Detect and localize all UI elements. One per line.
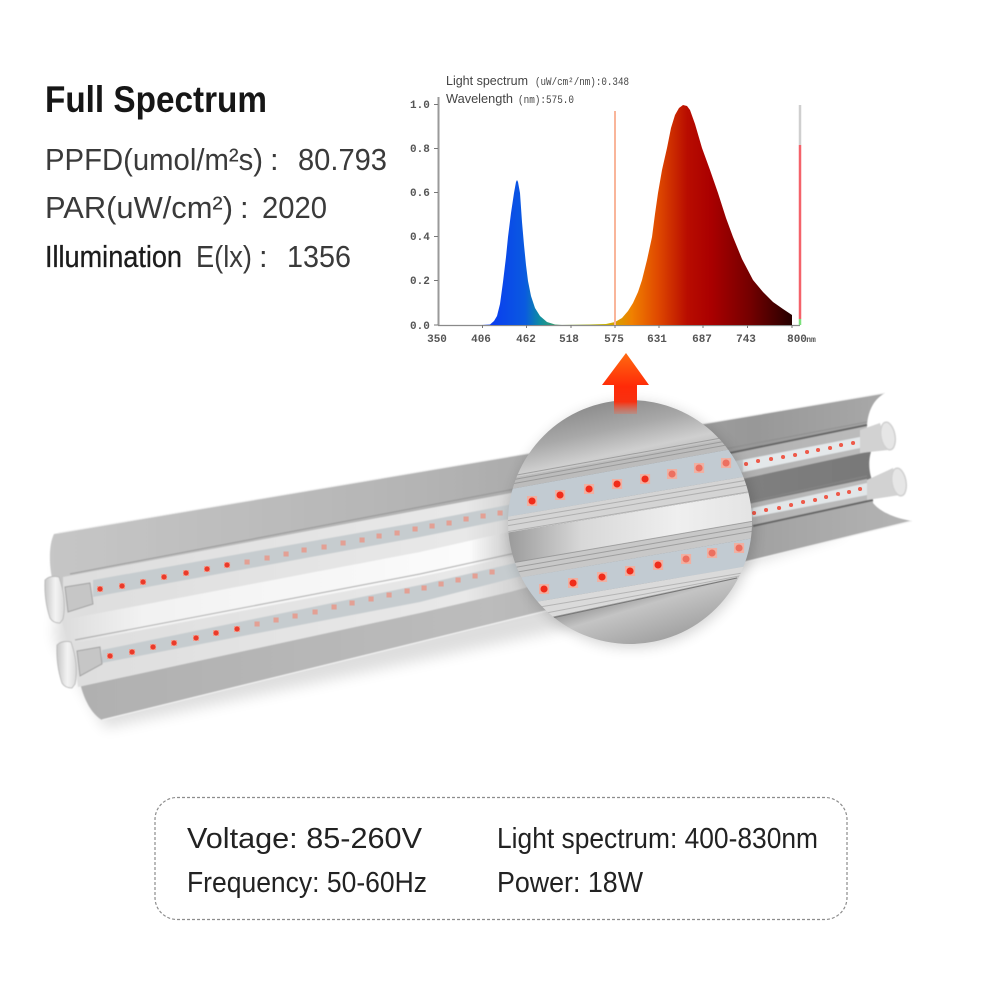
tube 1 dark shade [725,425,867,454]
lens lower reflector [553,576,739,644]
PPFD reading: : [270,142,279,177]
panel: specifications [155,798,847,920]
tube 2 ridges [75,476,867,640]
lens tube 2 housing [516,522,752,577]
lens led housings [532,463,739,589]
tube 2 dark shade [753,500,873,526]
red peak [560,105,792,325]
x axis labels: 350 [427,334,447,346]
x axis labels: 518 [559,334,579,346]
chart readout: (uW/cm²/nm):0.348 [535,77,629,89]
x axis labels: nm [806,336,816,345]
right end cap 1 [879,421,897,451]
x axis labels: 743 [736,334,756,346]
left end cap 2 [57,641,76,688]
wavelength cursor [614,111,616,325]
lens tube 2 strip [522,538,751,602]
power spec: Power: 18W [497,867,644,899]
tube 1 right strip [743,437,860,472]
PAR reading: 2020 [262,190,327,225]
lens tube 2 lower ridges [538,567,743,616]
lens tube 1 lower ridges [508,477,748,532]
illumination reading: Illumination [45,239,182,274]
lower reflector [78,490,912,720]
tube 2 socket [77,647,102,676]
y axis labels: 0.8 [410,144,430,156]
x axis labels [427,334,816,346]
y axis labels: 1.0 [410,100,430,112]
lens shadow [510,403,754,647]
chart readout: Light spectrum [446,74,528,88]
lamp [45,393,912,728]
right end cap 2 [890,467,908,497]
tube 2 housing [73,479,867,687]
text block: measurements [45,142,387,274]
chart readout [446,74,629,107]
x axis labels: 462 [516,334,536,346]
lens led cores bright [532,479,658,589]
chart axes [434,97,800,328]
tube 1 led strip [93,437,860,597]
illumination reading: 1356 [287,239,351,274]
y axis labels: 0.6 [410,188,430,200]
frequency spec: Frequency: 50-60Hz [187,867,427,899]
left end cap 1 [45,576,64,623]
tube 2 right strip [753,483,867,517]
reflector bottom edge highlight [102,521,912,720]
tube 1 ridges [70,422,867,574]
lens upper reflector [516,400,722,477]
magnified lens [505,398,760,653]
gap between tubes [60,447,873,650]
led cores: bright left group [100,565,237,656]
y axis labels: 0.0 [410,321,430,333]
panel outline [155,798,847,920]
PPFD reading [45,142,387,177]
y axis labels [410,100,430,333]
x axis labels: 575 [604,334,624,346]
leds: right group [746,443,860,513]
title: Full Spectrum [45,79,267,120]
blue peak [482,180,562,325]
lamp shadow [55,530,850,728]
PAR reading: PAR(uW/cm²) [45,190,233,225]
lens led cores pale [672,463,739,559]
lens tube 1 housing [512,442,728,488]
right tube 2 body [867,468,900,500]
arrow: points from lens to chart [602,353,649,414]
chart readout: Wavelength [446,92,513,106]
PAR reading: : [240,190,249,225]
tube 1 socket [65,583,93,612]
lens ridges top [514,438,725,484]
illumination reading: E(lx) [196,239,252,274]
voltage spec: Voltage: 85-260V [187,823,423,855]
x axis labels: 631 [647,334,667,346]
light spectrum spec: Light spectrum: 400-830nm [497,823,818,855]
y axis labels: 0.2 [410,276,430,288]
lens contents [508,400,752,644]
level indicator [799,105,801,325]
illumination reading [45,239,351,274]
spectrum chart [410,74,816,346]
upper reflector [50,393,885,600]
lens tube 1 strip [508,450,744,516]
tube 1 housing [63,425,867,620]
y axis labels: 0.4 [410,232,430,244]
right tube 1 body [860,423,888,453]
x axis labels: 406 [471,334,491,346]
x axis labels: 687 [692,334,712,346]
PPFD reading: PPFD(umol/m²s) [45,142,263,177]
lens gap [508,493,752,562]
x axis labels: 800 [787,334,807,346]
chart readout: (nm):575.0 [518,95,574,107]
illumination reading: : [259,239,268,274]
PAR reading [45,190,327,225]
lamp body [45,393,912,720]
tube 2 led strip [102,483,867,663]
leds: bright left group [100,565,237,656]
PPFD reading: 80.793 [298,142,387,177]
leds: pale far group [247,513,500,624]
reflector top edge highlight [58,393,885,533]
